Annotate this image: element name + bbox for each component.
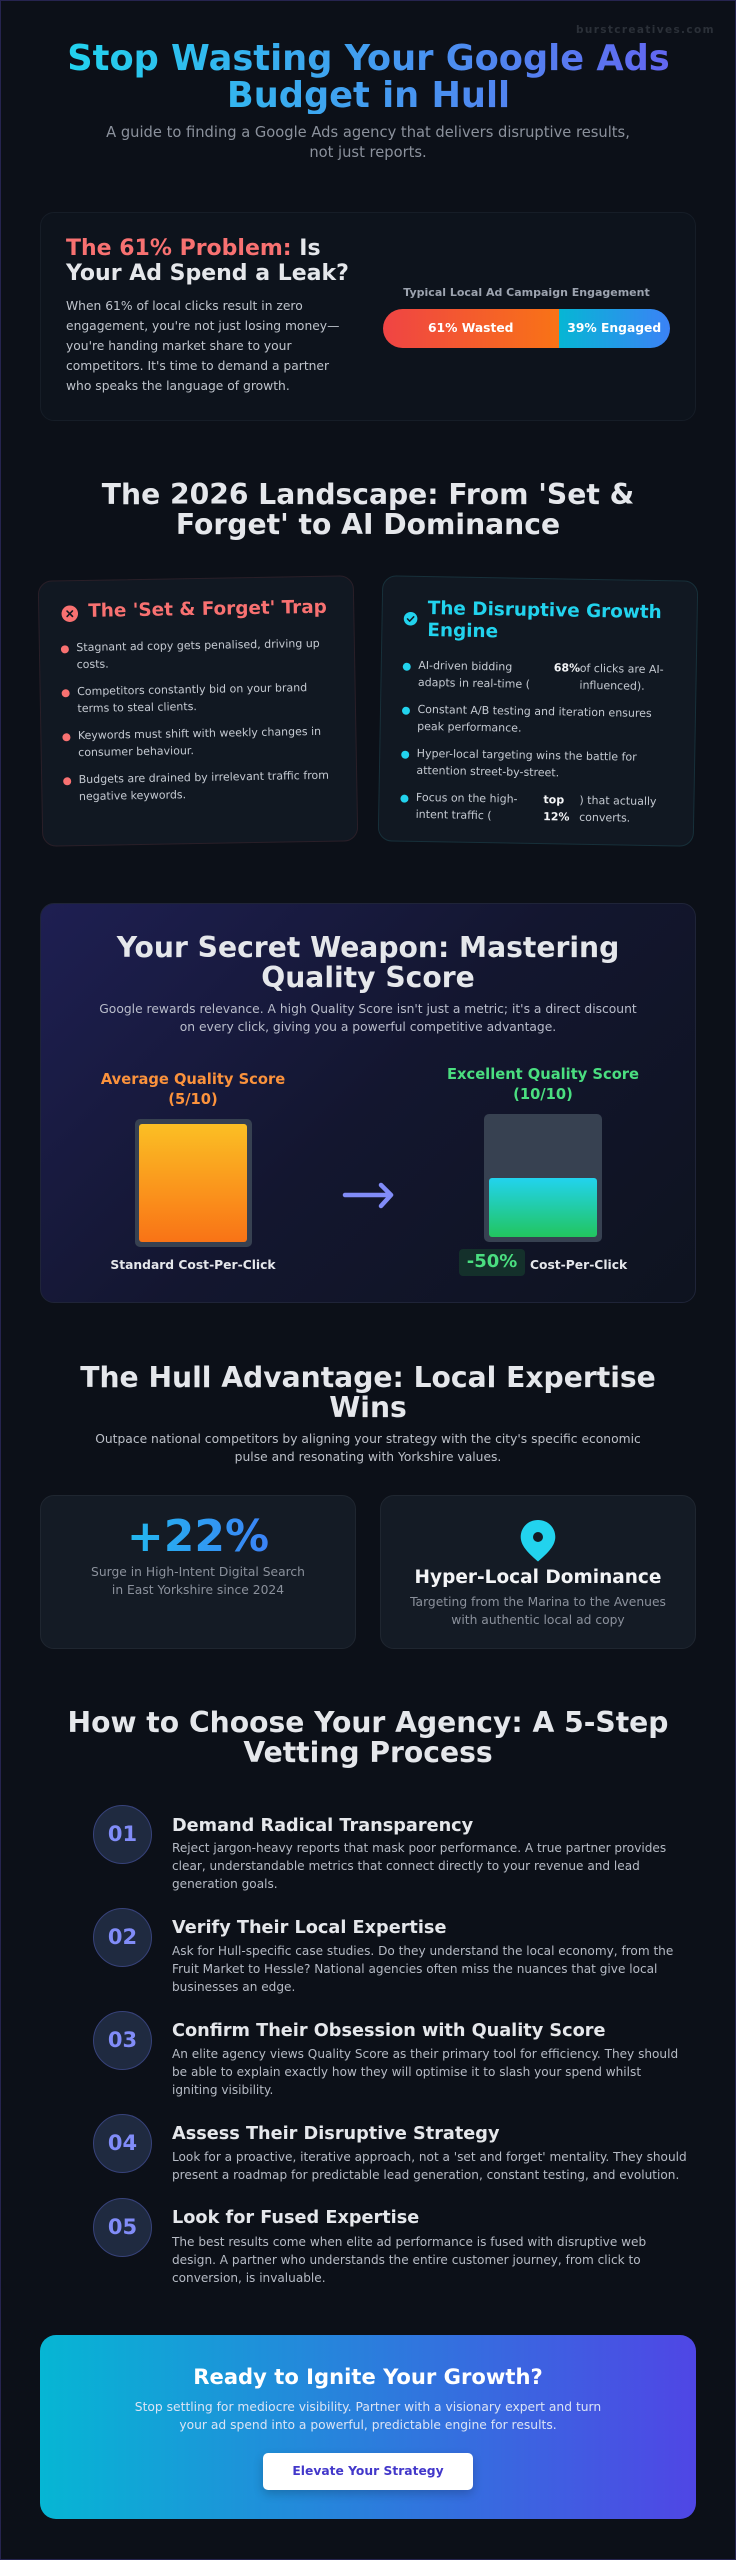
subtitle: not just reports. bbox=[309, 144, 427, 161]
step description: Fruit Market to Hessle? National agencies often miss the nuances that give local bbox=[172, 1962, 657, 1976]
cta button bbox=[263, 2453, 473, 2490]
watermark: burstcreatives.com bbox=[576, 24, 715, 36]
icon: check circle bbox=[404, 612, 418, 626]
list: growth points: AI-driven bidding bbox=[418, 659, 512, 674]
list: growth points: ) that actually bbox=[579, 793, 657, 808]
hull intro bbox=[95, 1432, 641, 1464]
quality score intro: Google rewards relevance. A high Quality Score isn't just a metric; it's a direct discount bbox=[99, 1002, 637, 1016]
cta button: Elevate Your Strategy bbox=[292, 2464, 444, 2478]
list: growth points: peak performance. bbox=[417, 720, 522, 735]
cta text bbox=[135, 2400, 601, 2432]
heading: 5-step process: How to Choose Your Agency: A 5-Step bbox=[68, 1706, 668, 1738]
list: growth points bbox=[400, 659, 664, 825]
problem paragraph bbox=[66, 299, 339, 393]
icon: x circle bbox=[62, 606, 78, 622]
step description bbox=[172, 1841, 666, 1891]
list: trap points bbox=[60, 637, 329, 803]
list: growth points: 68% bbox=[554, 661, 580, 675]
step description: design. A partner who understands the entire customer journey, from click to bbox=[172, 2253, 641, 2267]
problem paragraph: who speaks the language of growth. bbox=[66, 379, 290, 393]
list: growth points: Constant A/B testing and iteration ensures bbox=[417, 702, 652, 719]
badge: minus 50 percent: -50% bbox=[467, 1251, 517, 1272]
heading: quality score: Your Secret Weapon: Mastering bbox=[117, 931, 619, 964]
label: excellent quality score bbox=[447, 1066, 639, 1103]
gauge: average cost bbox=[135, 1119, 252, 1247]
step 3 bbox=[93, 2011, 678, 2097]
step description: businesses an edge. bbox=[172, 1980, 295, 1994]
step 5 bbox=[93, 2198, 646, 2285]
bar segment: 61% wasted bbox=[383, 309, 558, 348]
label: cost per click: Cost-Per-Click bbox=[530, 1258, 627, 1272]
hyper-local caption: Targeting from the Marina to the Avenues bbox=[410, 1595, 666, 1609]
stacked bar: engagement split bbox=[383, 309, 670, 348]
step description bbox=[172, 2235, 646, 2285]
heading: hull advantage: Wins bbox=[329, 1391, 407, 1424]
heading: growth engine: The Disruptive Growth bbox=[428, 598, 662, 623]
heading: quality score: Quality Score bbox=[261, 961, 475, 994]
list: trap points: costs. bbox=[77, 658, 109, 672]
heading: 5-step process bbox=[68, 1706, 668, 1768]
heading: hyper-local dominance: Hyper-Local Dominance bbox=[415, 1567, 661, 1588]
heading: growth engine bbox=[427, 598, 662, 642]
panel: 61% problem bbox=[40, 212, 696, 421]
step number 01 bbox=[93, 1805, 152, 1864]
stat: +22%: +22% bbox=[127, 1511, 269, 1562]
step description: Look for a proactive, iterative approach, not a 'set and forget' mentality. They should bbox=[172, 2150, 687, 2164]
step number 01: 01 bbox=[108, 1822, 137, 1846]
stat caption: in East Yorkshire since 2024 bbox=[112, 1582, 284, 1596]
step description: Reject jargon-heavy reports that mask poor performance. A true partner provides bbox=[172, 1841, 666, 1855]
step number 04: 04 bbox=[108, 2131, 137, 2155]
step number 05 bbox=[93, 2198, 152, 2257]
title: Budget in Hull bbox=[227, 75, 510, 116]
step 2 bbox=[93, 1908, 673, 1994]
chart label: Typical Local Ad Campaign Engagement bbox=[403, 286, 650, 299]
hull intro: pulse and resonating with Yorkshire values. bbox=[235, 1450, 501, 1464]
heading: 61% problem: Your Ad Spend a Leak? bbox=[66, 261, 349, 286]
step description: igniting visibility. bbox=[172, 2083, 273, 2097]
step number 02 bbox=[93, 1908, 152, 1967]
list: growth points: of clicks are AI- bbox=[580, 662, 664, 676]
quality score intro: on every click, giving you a powerful competitive advantage. bbox=[180, 1020, 556, 1034]
cta heading: Ready to Ignite Your Growth? bbox=[193, 2364, 543, 2389]
list: growth points: top bbox=[543, 793, 564, 806]
step description: be able to explain exactly how they will optimise it to slash your spend whilst bbox=[172, 2065, 641, 2079]
bar segment: 61% wasted: 61% Wasted bbox=[428, 321, 513, 335]
quality score intro bbox=[99, 1002, 637, 1034]
panel: stat 22 percent bbox=[40, 1495, 356, 1649]
step title: Verify Their Local Expertise bbox=[172, 1918, 446, 1938]
heading: 2026 landscape: Forget' to AI Dominance bbox=[176, 508, 560, 540]
list: growth points: 12% bbox=[543, 810, 570, 823]
heading: hull advantage bbox=[80, 1361, 656, 1424]
list: trap points: Competitors constantly bid on your brand bbox=[77, 681, 307, 698]
step description: conversion, is invaluable. bbox=[172, 2271, 326, 2285]
badge: minus 50 percent bbox=[459, 1249, 525, 1276]
title bbox=[67, 40, 670, 114]
label: excellent quality score: (10/10) bbox=[513, 1086, 573, 1103]
step description bbox=[172, 2150, 687, 2182]
heading: 2026 landscape: The 2026 Landscape: From 'Set & bbox=[102, 478, 634, 510]
step title: Look for Fused Expertise bbox=[172, 2208, 419, 2228]
title: Stop Wasting Your Google Ads bbox=[67, 38, 670, 79]
step 1 bbox=[93, 1805, 666, 1891]
list: trap points: Stagnant ad copy gets penalised, driving up bbox=[76, 637, 320, 654]
list: growth points: Focus on the high- bbox=[416, 790, 518, 805]
heading: 61% problem bbox=[66, 236, 349, 286]
step title: Assess Their Disruptive Strategy bbox=[172, 2124, 500, 2144]
cta text: Stop settling for mediocre visibility. Partner with a visionary expert and turn bbox=[135, 2400, 601, 2414]
problem paragraph: engagement, you're not just losing money— bbox=[66, 319, 339, 333]
heading: hull advantage: The Hull Advantage: Local Expertise bbox=[80, 1361, 656, 1394]
subtitle bbox=[106, 124, 630, 161]
list: trap points: negative keywords. bbox=[79, 789, 186, 803]
heading: trap: The 'Set & Forget' Trap bbox=[88, 596, 327, 621]
step description bbox=[172, 2047, 678, 2097]
arrow bbox=[342, 1182, 394, 1208]
step description: Ask for Hull-specific case studies. Do they understand the local economy, from the bbox=[172, 1944, 673, 1958]
bar segment: 39% engaged bbox=[558, 309, 670, 348]
hyper-local caption: with authentic local ad copy bbox=[451, 1612, 625, 1626]
heading: 5-step process: Vetting Process bbox=[243, 1736, 493, 1768]
heading: 61% problem: The 61% Problem: Is bbox=[66, 236, 321, 261]
step description: An elite agency views Quality Score as their primary tool for efficiency. They should bbox=[172, 2047, 678, 2061]
problem paragraph: When 61% of local clicks result in zero bbox=[66, 299, 303, 313]
step description: The best results come when elite ad performance is fused with disruptive web bbox=[172, 2235, 646, 2249]
subtitle: A guide to finding a Google Ads agency that delivers disruptive results, bbox=[106, 124, 630, 141]
list: trap points: terms to steal clients. bbox=[77, 700, 197, 716]
panel: hyper-local bbox=[380, 1495, 696, 1649]
icon: map pin bbox=[520, 1520, 556, 1562]
panel: set and forget trap bbox=[38, 575, 358, 847]
panel: disruptive growth engine bbox=[378, 575, 698, 847]
list: trap points: Keywords must shift with weekly changes in bbox=[78, 725, 321, 742]
problem paragraph: you're handing market share to your bbox=[66, 339, 292, 353]
step number 02: 02 bbox=[108, 1925, 137, 1949]
list: growth points: Hyper-local targeting wins the battle for bbox=[417, 747, 637, 764]
list: trap points: consumer behaviour. bbox=[78, 744, 194, 760]
list: growth points: converts. bbox=[579, 811, 630, 825]
step description: clear, understandable metrics that connect directly to your revenue and lead bbox=[172, 1859, 640, 1873]
step number 03 bbox=[93, 2011, 152, 2070]
list: growth points: attention street-by-street. bbox=[416, 764, 559, 780]
step description: present a roadmap for predictable lead generation, constant testing, and evolution. bbox=[172, 2168, 679, 2182]
panel: call to action bbox=[40, 2335, 696, 2519]
bar segment: 39% engaged: 39% Engaged bbox=[567, 321, 661, 335]
step title: Confirm Their Obsession with Quality Score bbox=[172, 2020, 606, 2040]
list: trap points: Budgets are drained by irrelevant traffic from bbox=[79, 769, 329, 786]
label: standard cost per click: Standard Cost-Per-Click bbox=[110, 1258, 276, 1272]
step description bbox=[172, 1944, 673, 1994]
problem paragraph: competitors. It's time to demand a partner bbox=[66, 359, 329, 373]
panel: quality score bbox=[40, 903, 696, 1303]
list: growth points: influenced). bbox=[579, 679, 645, 693]
stat caption: Surge in High-Intent Digital Search bbox=[91, 1565, 305, 1579]
hull intro: Outpace national competitors by aligning your strategy with the city's specific economic bbox=[95, 1432, 641, 1446]
gauge: excellent cost bbox=[484, 1114, 602, 1242]
label: average quality score: Average Quality Score bbox=[101, 1071, 285, 1088]
heading: growth engine: Engine bbox=[427, 620, 498, 642]
step description: generation goals. bbox=[172, 1877, 278, 1891]
label: excellent quality score: Excellent Quality Score bbox=[447, 1066, 639, 1083]
heading: quality score bbox=[116, 931, 619, 994]
list: growth points: adapts in real-time ( bbox=[418, 676, 530, 691]
hyper-local caption bbox=[410, 1595, 666, 1626]
heading: 2026 landscape bbox=[102, 478, 634, 540]
step number 03: 03 bbox=[108, 2028, 137, 2052]
step number 04 bbox=[93, 2114, 152, 2173]
cta text: your ad spend into a powerful, predictable engine for results. bbox=[179, 2418, 557, 2432]
stat caption bbox=[91, 1565, 305, 1596]
step title: Demand Radical Transparency bbox=[172, 1816, 473, 1836]
label: average quality score bbox=[101, 1071, 285, 1108]
step 4 bbox=[93, 2114, 687, 2182]
list: growth points: intent traffic ( bbox=[416, 808, 492, 822]
label: average quality score: (5/10) bbox=[168, 1091, 218, 1108]
step number 05: 05 bbox=[108, 2215, 137, 2239]
